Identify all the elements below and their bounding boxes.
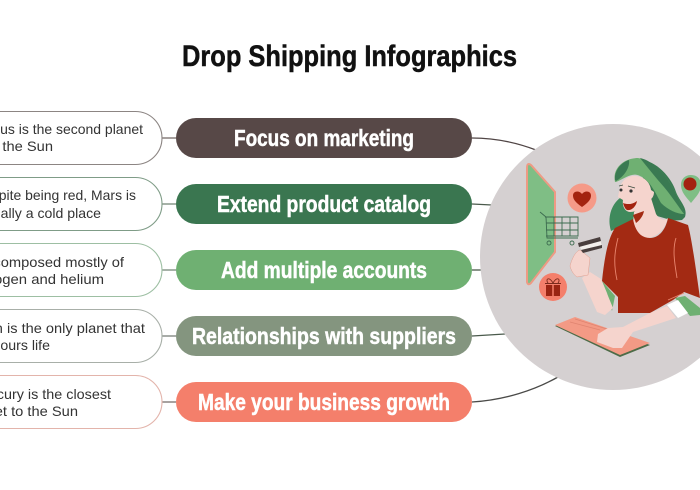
woman: back hair: [609, 198, 636, 231]
connector lines to illustration: [472, 138, 558, 402]
row 3: Add multiple accounts: [0, 244, 472, 296]
woman: shirt: [602, 218, 700, 313]
row 2: Extend product catalog: [0, 178, 472, 230]
icon: location pin: [681, 175, 700, 203]
icon: heart: [568, 184, 596, 212]
row 1: Focus on marketing: [0, 112, 472, 164]
row 4: Relationships with suppliers: [0, 310, 472, 362]
woman: front hair: [615, 158, 684, 214]
row 2: Extend product catalog: Extend product catalog: [217, 191, 431, 217]
woman: left sleeve: [602, 281, 615, 311]
illustration: online shopper: [480, 124, 700, 390]
row 4: Relationships with suppliers: Relationships with suppliers: [192, 323, 456, 349]
woman: face: [618, 176, 654, 212]
woman: typing arm and hand: [597, 306, 676, 348]
icon: gift: [539, 273, 567, 301]
woman: right sleeve and cuff: [675, 296, 700, 316]
icon: shopping cart: [540, 212, 578, 245]
row 1: Focus on marketing: Focus on marketing: [234, 125, 414, 151]
woman: holding arm and hand: [582, 272, 613, 315]
row 5: Make your business growth: [0, 376, 472, 428]
background circle: [480, 124, 700, 390]
title: Drop Shipping Infographics: [182, 40, 517, 73]
icon: credit card: [578, 237, 602, 253]
icon: phone screen: [527, 164, 555, 284]
row 5: Make your business growth: Make your business growth: [198, 389, 450, 415]
row 3: Add multiple accounts: Add multiple accounts: [221, 257, 427, 283]
woman: neck: [633, 198, 668, 238]
icon: keyboard: [555, 317, 650, 357]
